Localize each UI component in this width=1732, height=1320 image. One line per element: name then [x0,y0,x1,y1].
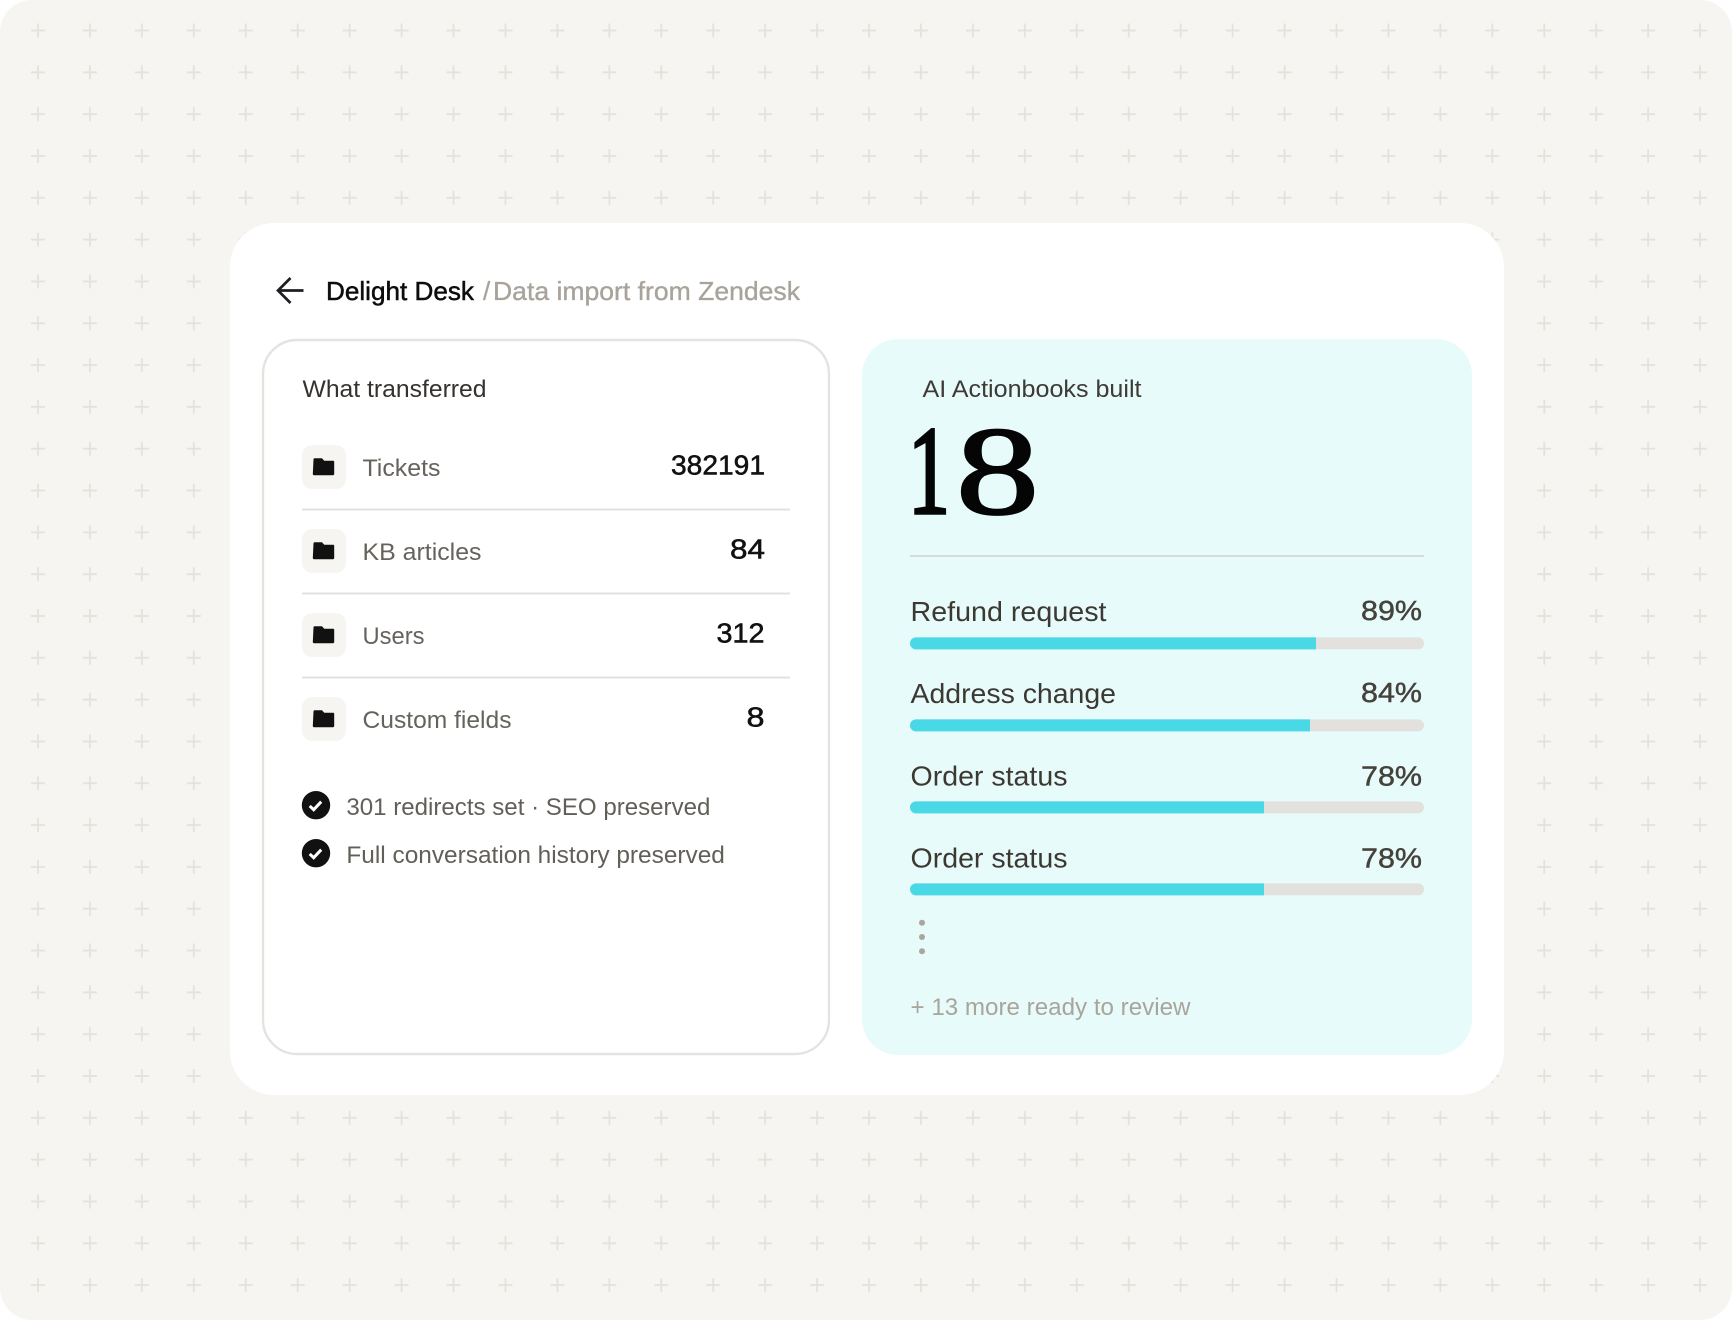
row: tickets [302,445,765,489]
heading: what transferred: What transferred [302,376,486,403]
icon: back arrow [278,278,304,303]
row: KB articles: 84 [730,534,765,565]
bar: refund request: 89% [1361,595,1422,626]
row: custom fields: 8 [746,702,764,733]
checklist item: redirects: 301 redirects set · SEO preserved [346,794,710,821]
row: KB articles [302,529,765,573]
row: tickets: Tickets [362,455,440,482]
title: breadcrumb [326,276,801,306]
bar: address change: Address change [910,678,1116,709]
bar: order status: Order status [910,760,1068,792]
row: custom fields: Custom fields [362,707,512,734]
bar: order status 2: 78% [1361,842,1422,874]
row: tickets: 382191 [671,450,765,481]
main white card [230,223,1504,1095]
panel: AI actionbooks [862,339,1472,1055]
panel: what transferred [263,340,829,1054]
bar: refund request: Refund request [910,596,1107,627]
bar: order status: 78% [1361,760,1422,792]
bar: refund request [910,595,1424,649]
icon: vertical ellipsis [919,920,925,954]
bar: order status 2: Order status [910,842,1068,874]
row: KB articles: KB articles [362,539,482,566]
checklist item: history: Full conversation history preserved [346,842,725,869]
row: users [302,613,764,657]
row: users: 312 [716,618,764,649]
big number: 18: 8 [956,402,1039,542]
title: breadcrumb: / [483,276,491,306]
title: breadcrumb: Data import from Zendesk [493,276,801,306]
big number: 18: 1 [908,402,950,541]
bar: order status 2 [910,842,1424,895]
title: breadcrumb: Delight Desk [326,276,475,306]
footer note: more ready: + 13 more ready to review [910,994,1191,1021]
big number: 18 [908,402,1039,542]
row: custom fields [302,697,764,741]
row: users: Users [362,623,424,650]
bar: order status [910,760,1424,813]
bar: address change: 84% [1361,677,1422,708]
bar: address change [910,677,1424,731]
heading: AI actionbooks built: AI Actionbooks built [922,376,1142,403]
